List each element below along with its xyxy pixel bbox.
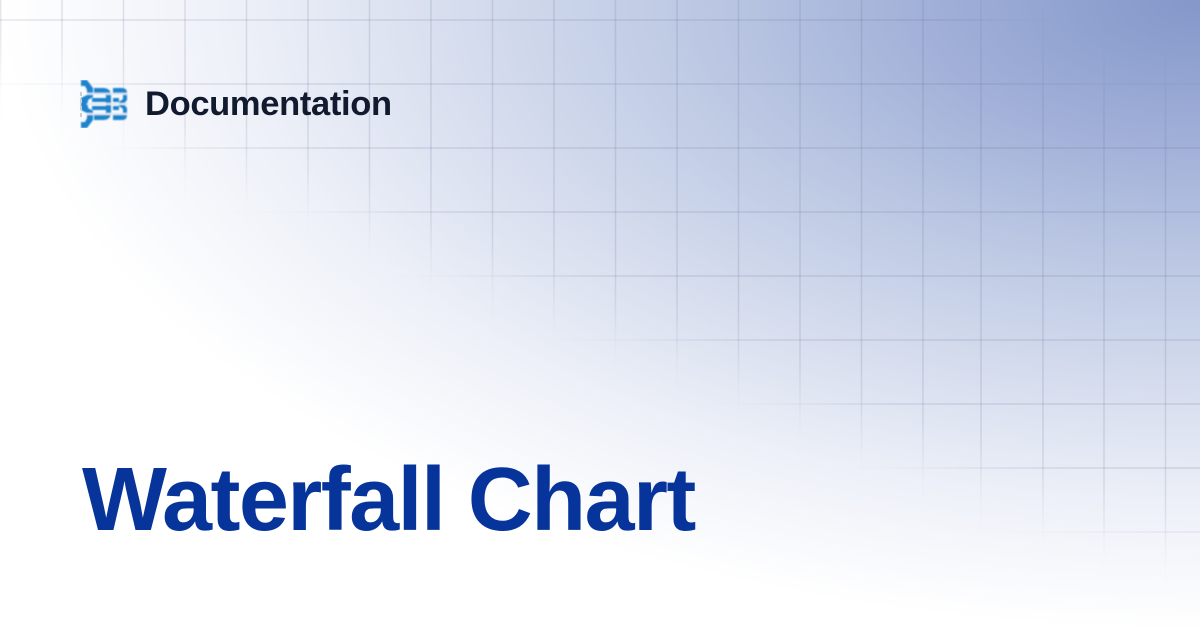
title: Waterfall Chart: [82, 450, 695, 550]
brand heading: Documentation: [145, 85, 392, 123]
icon: documentation logo: [80, 80, 128, 128]
